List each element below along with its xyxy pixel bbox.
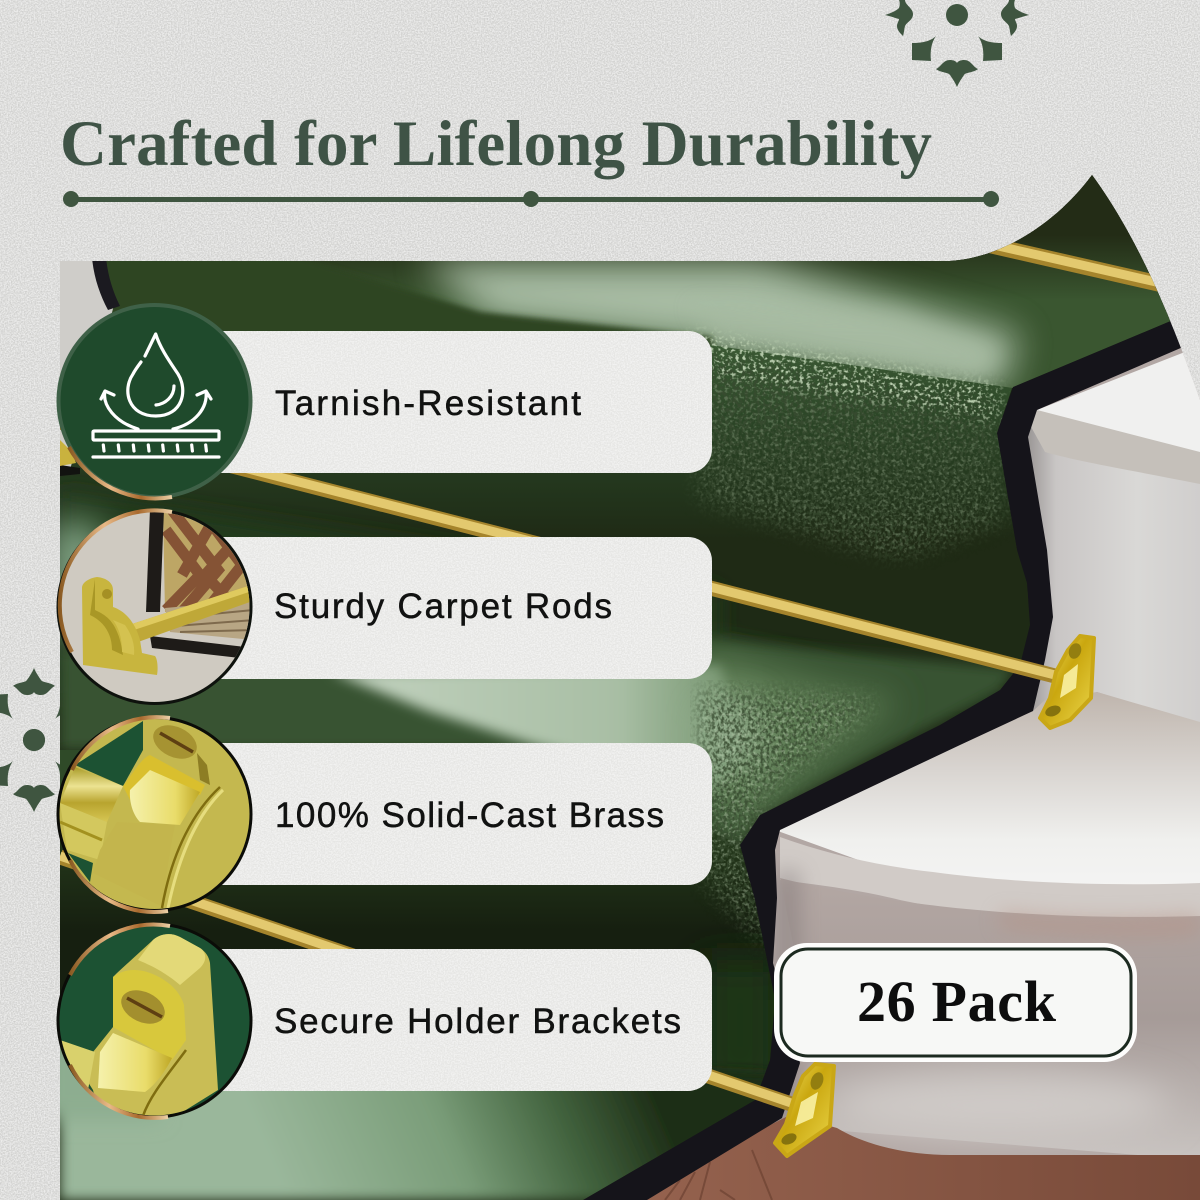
icon: holder bracket close-up	[56, 922, 254, 1121]
body shoulder	[123, 755, 205, 800]
lower curved face	[93, 822, 175, 907]
panel: solid-cast brass	[150, 743, 712, 885]
pale patch at far left	[50, 520, 110, 640]
badge: 26 pack	[774, 943, 1137, 1062]
label: secure holder brackets: Secure Holder Brackets	[274, 1002, 681, 1041]
decorative ornament: top right	[885, 0, 1029, 87]
rod lower	[60, 803, 107, 860]
dark band beneath top left wall	[60, 465, 80, 476]
title divider with three dots	[63, 191, 999, 207]
riser one texture	[698, 344, 1006, 562]
brass bracket: lower	[775, 1064, 834, 1156]
icon: rod and bracket close-up	[56, 505, 254, 707]
label: solid-cast brass: 100% Solid-Cast Brass	[275, 796, 664, 835]
screw head	[116, 984, 170, 1030]
icon: water-repellent surface in green circle	[56, 303, 252, 499]
tread two	[60, 640, 1015, 845]
patterned carpet	[163, 510, 254, 612]
badge label: 26 Pack	[857, 969, 1057, 1034]
tread three	[60, 1047, 726, 1200]
carpet rod: middle	[60, 421, 1055, 676]
bracket crown	[138, 934, 205, 985]
stair wall and steps	[647, 321, 1200, 1200]
gold rod	[132, 586, 250, 642]
brass bracket: middle	[1040, 636, 1094, 728]
gold fragment at left edge	[60, 440, 76, 466]
label: sturdy carpet rods: Sturdy Carpet Rods	[274, 587, 612, 626]
carpet rod: top	[989, 242, 1158, 292]
riser one	[60, 345, 1012, 504]
screw head	[148, 719, 202, 765]
panel: tarnish-resistant	[150, 331, 712, 473]
tread one	[106, 175, 1170, 388]
rod upper	[60, 767, 123, 822]
white wall at top left	[60, 261, 114, 467]
icon: solid brass close-up	[56, 716, 254, 914]
carpet rod: lower	[60, 856, 800, 1107]
lit barrel	[98, 1033, 172, 1092]
gold bracket	[82, 577, 158, 675]
riser two	[60, 750, 775, 1000]
bracket body	[63, 934, 218, 1118]
label: tarnish-resistant: Tarnish-Resistant	[275, 384, 581, 423]
binding strip at top left	[92, 258, 120, 310]
bright barrel	[130, 770, 200, 825]
face plate	[113, 970, 186, 1060]
decorative ornament: left edge	[0, 668, 106, 812]
panel: secure holder brackets	[150, 949, 712, 1091]
dark left part of tread one	[112, 262, 716, 346]
title: Crafted for Lifelong Durability	[60, 108, 932, 180]
carpet black binding	[583, 175, 1181, 1200]
panel: sturdy carpet rods	[150, 537, 712, 679]
